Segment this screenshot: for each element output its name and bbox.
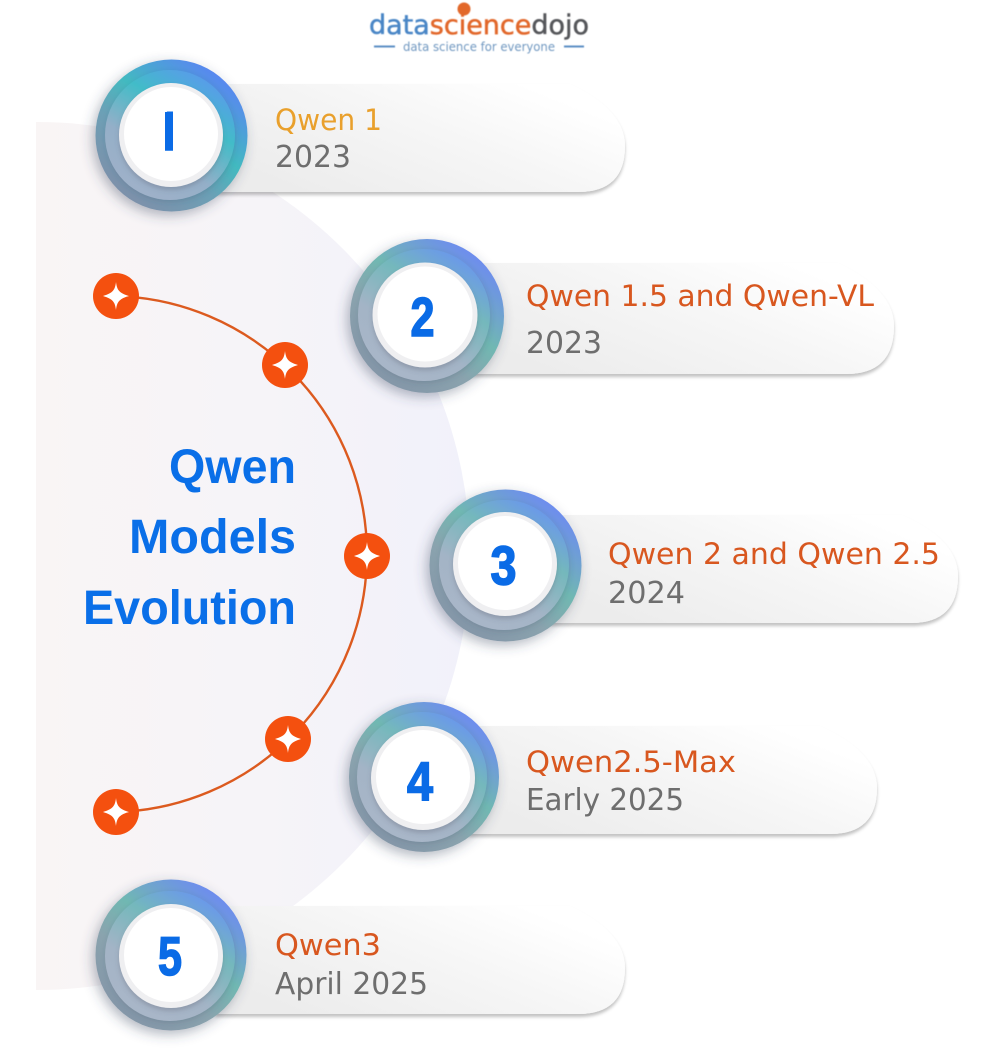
- card: [468, 263, 894, 374]
- label: Qwen 1: [275, 103, 382, 137]
- label: Qwen 2 and Qwen 2.5: [608, 537, 940, 571]
- logo: [369, 2, 589, 54]
- arc node 2: [262, 342, 308, 388]
- arc node 3: [344, 533, 390, 579]
- item 3: Qwen 2 and Qwen 2.5: [430, 490, 958, 642]
- badge: 1: [157, 100, 181, 162]
- label: Qwen 1.5 and Qwen-VL: [526, 279, 874, 313]
- badge: 2: [410, 286, 434, 348]
- timeline arc: [93, 273, 390, 835]
- item 1: Qwen 1: [96, 60, 625, 212]
- item 5: Qwen3: [96, 880, 625, 1030]
- item 2: Qwen 1.5 and Qwen-VL: [350, 239, 894, 393]
- title: Models: [129, 511, 296, 564]
- logo wordmark: datasciencedojo: [369, 10, 589, 41]
- date: Early 2025: [526, 783, 684, 818]
- arc node 1: [93, 273, 139, 319]
- title: Qwen: [169, 441, 296, 494]
- date: 2023: [275, 140, 351, 175]
- label: Qwen3: [275, 928, 381, 962]
- card: [215, 84, 625, 192]
- date: 2024: [608, 576, 685, 611]
- background semicircle panel: [36, 122, 470, 990]
- label: Qwen2.5-Max: [526, 745, 736, 779]
- badge: 4: [407, 750, 433, 812]
- badge: [96, 880, 246, 1030]
- date: 2023: [526, 326, 602, 361]
- arc line: [116, 296, 367, 812]
- card: [468, 726, 877, 834]
- badge: 5: [158, 925, 182, 987]
- badge: 3: [490, 534, 516, 596]
- badge: [430, 490, 582, 642]
- logo tagline: data science for everyone: [403, 40, 555, 54]
- arc node 4: [265, 716, 311, 762]
- badge: [350, 239, 504, 393]
- item 4: Qwen2.5-Max: [349, 702, 877, 852]
- date: April 2025: [275, 967, 428, 1002]
- title: [83, 441, 296, 635]
- title: Evolution: [83, 582, 296, 635]
- logo rules: [374, 46, 584, 48]
- badge: [349, 702, 499, 852]
- logo head dot: [458, 2, 470, 16]
- card: [215, 906, 625, 1014]
- card: [550, 515, 958, 623]
- arc node 5: [93, 789, 139, 835]
- badge: [96, 60, 248, 212]
